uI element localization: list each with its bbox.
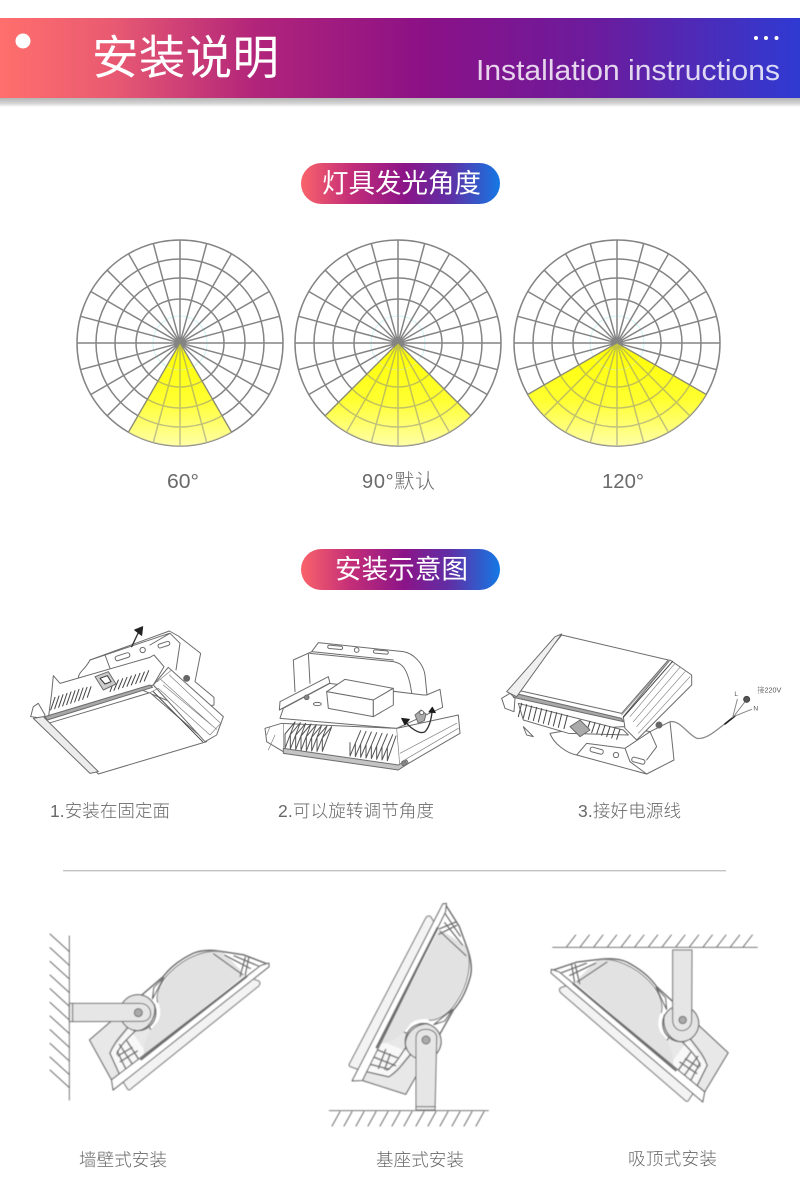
pill heading: beam angle xyxy=(301,163,500,204)
pill heading: installation diagram: 安装示意图 xyxy=(335,554,468,584)
ceiling arm xyxy=(673,950,692,1031)
step caption 1: 1.安装在固定面 xyxy=(50,801,170,821)
pill heading: beam angle: 灯具发光角度 xyxy=(322,168,481,198)
wire labels: N xyxy=(753,706,758,713)
ceiling lamp body xyxy=(542,924,744,1110)
header title: 安装说明 xyxy=(92,32,279,84)
step 1 illustration xyxy=(31,627,223,774)
base mount illustration xyxy=(329,897,499,1126)
wall arm xyxy=(69,1003,151,1022)
ceiling hatch xyxy=(553,935,757,947)
step caption 2: 2.可以旋转调节角度 xyxy=(278,801,434,821)
label 60: 60° xyxy=(167,471,199,493)
label 90 default: 90°默认 xyxy=(362,470,435,493)
caption wall mount: 墙壁式安装 xyxy=(79,1150,167,1170)
wall hatch xyxy=(50,934,69,1100)
ceiling mount illustration xyxy=(542,924,757,1110)
beam diagram 120 degrees xyxy=(514,240,720,446)
step 2 illustration xyxy=(265,643,460,770)
caption base mount: 基座式安装 xyxy=(376,1150,464,1170)
wire labels xyxy=(734,686,781,713)
three dots xyxy=(754,36,778,40)
header banner xyxy=(0,18,800,98)
header subtitle: Installation instructions xyxy=(476,55,780,87)
wire labels: 接220V xyxy=(757,686,781,695)
wire labels: L xyxy=(734,691,738,698)
beam diagram 60 degrees xyxy=(77,240,283,446)
base lamp body xyxy=(343,897,499,1110)
label 120: 120° xyxy=(602,471,644,493)
floor hatch xyxy=(329,1111,488,1126)
header dot xyxy=(16,34,30,48)
wall mount illustration xyxy=(50,916,278,1100)
header shadow xyxy=(0,98,800,107)
step caption 3: 3.接好电源线 xyxy=(578,801,681,821)
step 3 illustration xyxy=(502,634,781,774)
base arm xyxy=(416,1029,437,1110)
caption ceiling mount: 吸顶式安装 xyxy=(628,1149,717,1169)
wall lamp body xyxy=(74,916,278,1098)
pill heading: installation diagram xyxy=(301,549,500,590)
beam diagram 90 degrees xyxy=(295,240,501,446)
